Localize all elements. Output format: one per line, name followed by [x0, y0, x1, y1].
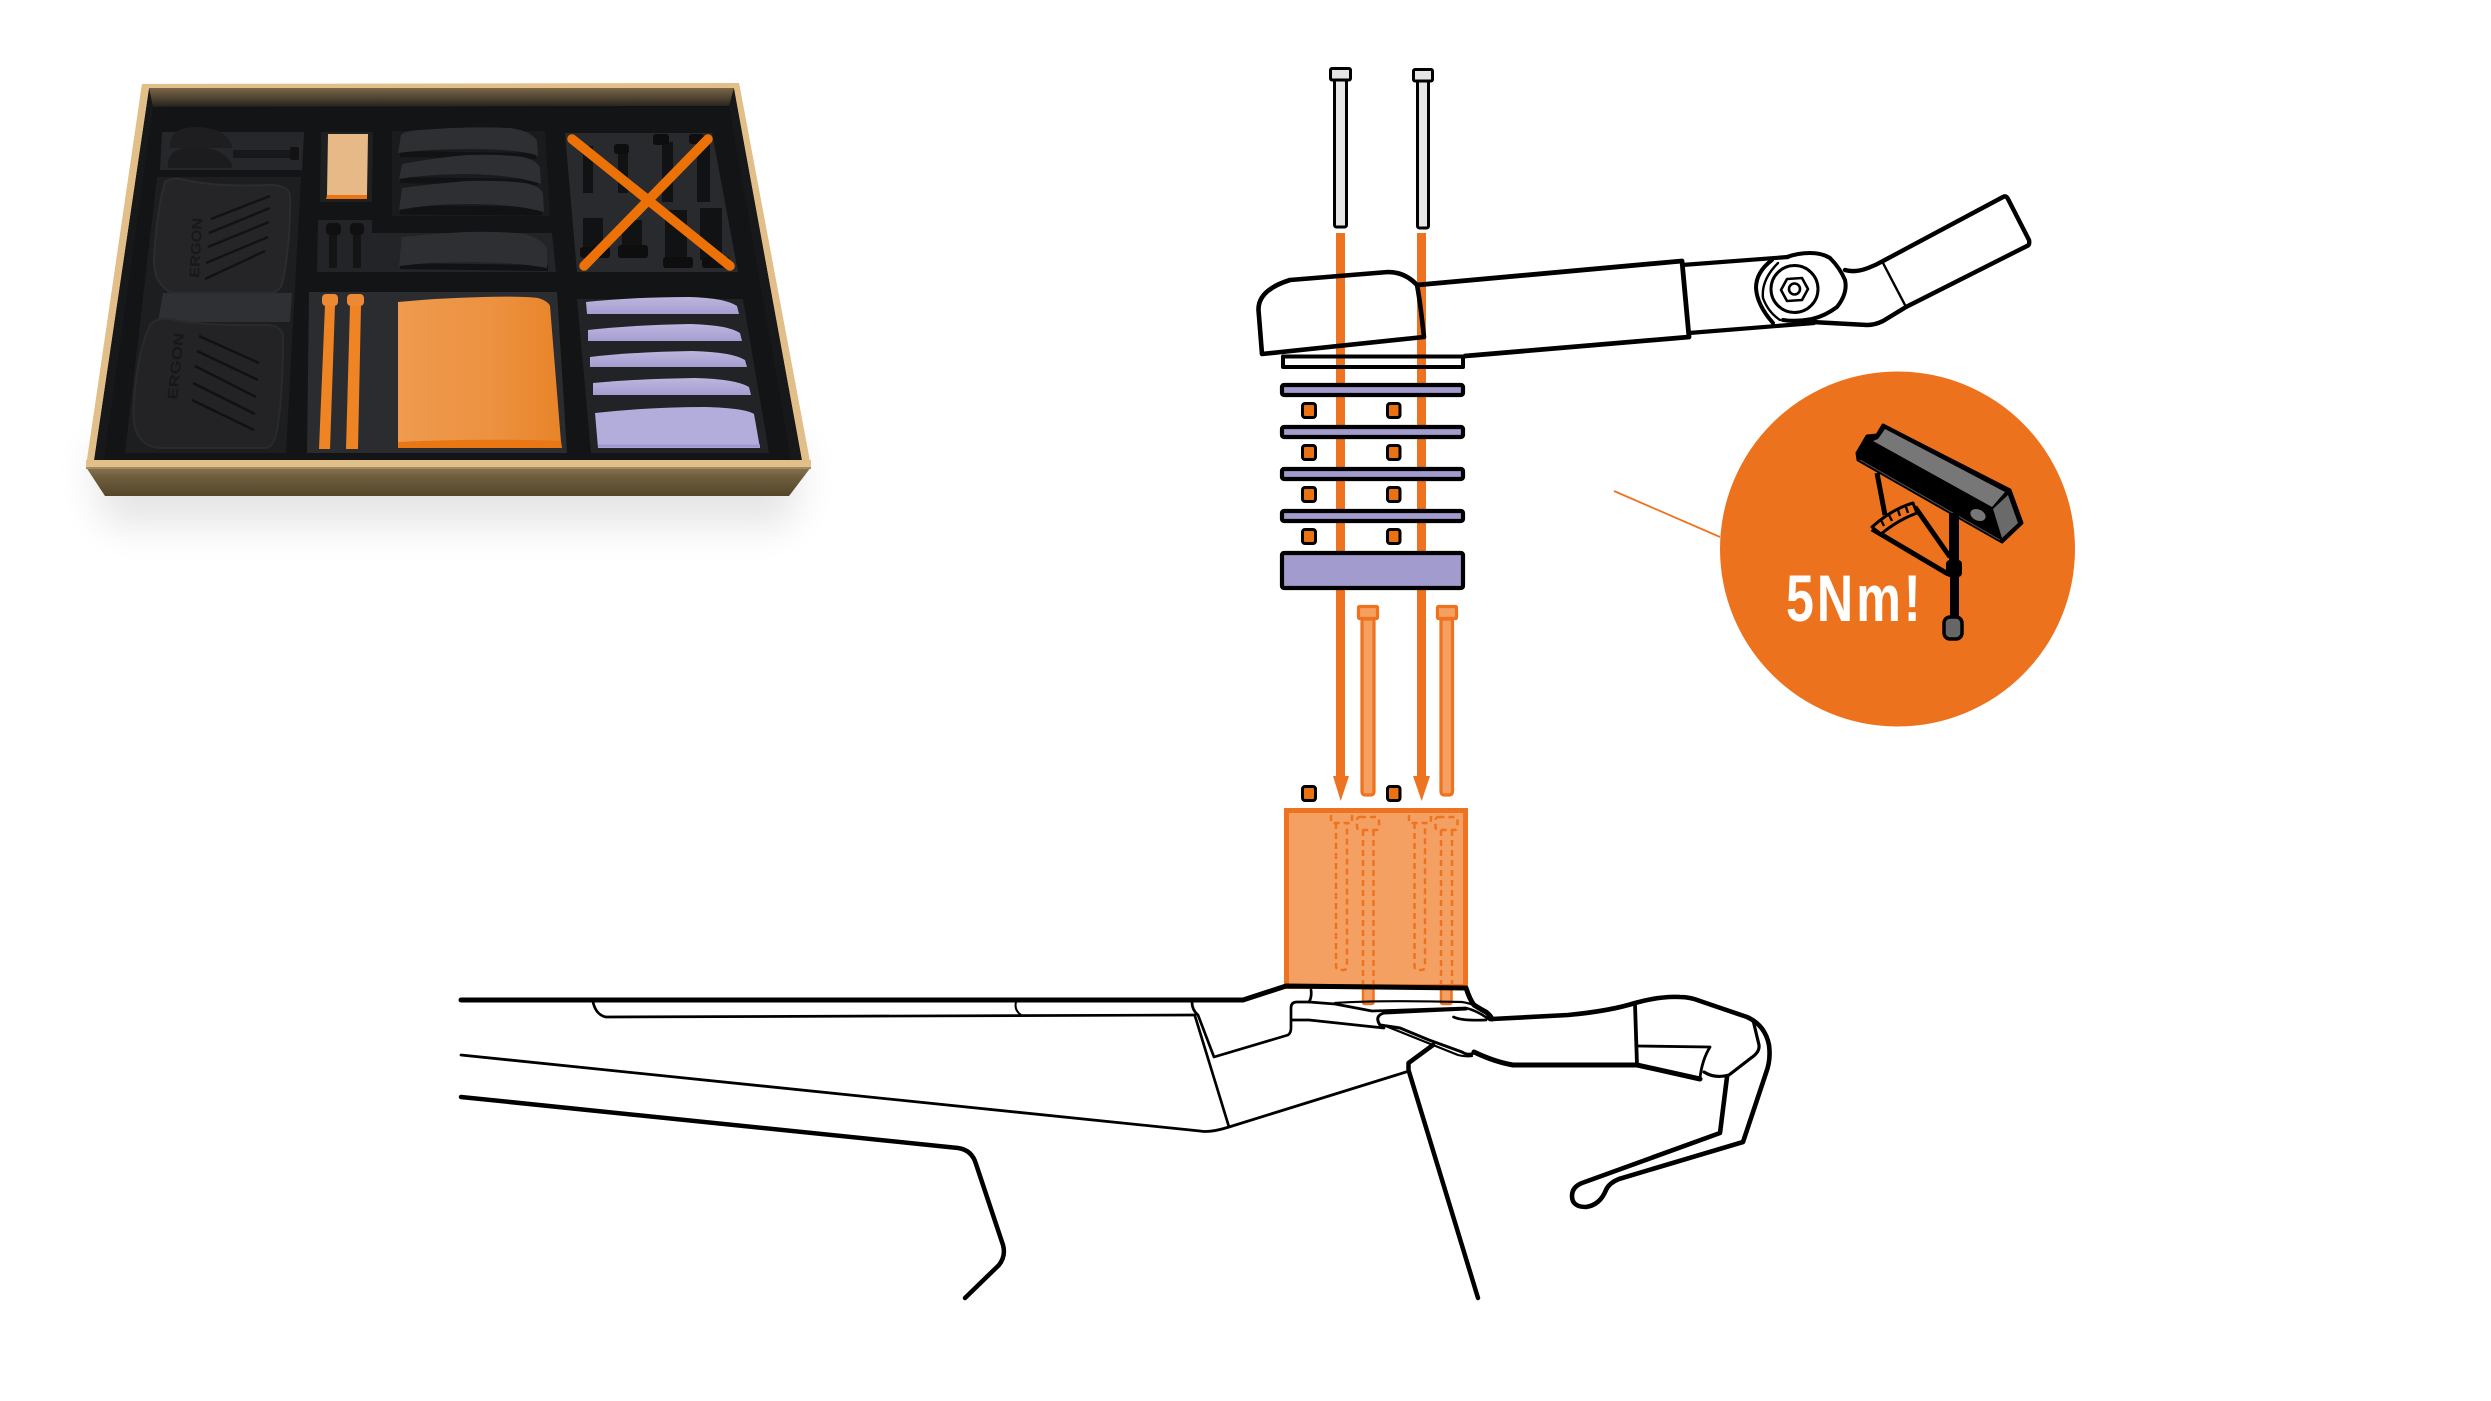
armrest shell	[1258, 272, 1424, 354]
thin spacer 1	[1282, 385, 1463, 395]
torque value: 5Nm!	[1786, 562, 1924, 636]
stem clamp lines	[1292, 1020, 1384, 1028]
aero extension with armrest	[1258, 196, 2029, 367]
pocket: black spacers	[392, 127, 550, 216]
extension sleeve	[1417, 261, 1689, 356]
orange arrow left	[1333, 233, 1349, 801]
pocket: orange bolts and orange sheet	[307, 292, 567, 453]
thin spacer 4	[1282, 511, 1463, 521]
callout leader line	[1614, 491, 1720, 537]
spacer stack	[1282, 385, 1463, 588]
pocket: purple spacers	[577, 297, 769, 453]
lower bolt right	[1438, 606, 1456, 795]
foam floor	[104, 106, 791, 460]
thin spacer 3	[1282, 469, 1463, 479]
bike cockpit line drawing	[461, 986, 1770, 1298]
top tube bottom line	[461, 1055, 1406, 1132]
tray shadow	[90, 450, 805, 525]
extension tip	[1812, 196, 2029, 325]
frame lower line	[461, 1097, 1004, 1298]
fork	[1408, 1045, 1478, 1298]
callout: torque 5 Nm	[1720, 372, 2075, 726]
right wall edge	[734, 83, 811, 467]
bolt ends below block	[1363, 985, 1452, 1004]
lower bolt left	[1358, 606, 1378, 795]
pocket: crossed-out long bolts	[565, 133, 738, 272]
small nuts	[1302, 404, 1400, 800]
icon: torque wrench on bar	[1857, 425, 2022, 639]
tray box	[86, 83, 811, 496]
top bolt right	[1414, 70, 1432, 228]
pocket and block: peach pad	[320, 132, 373, 202]
top bolt left	[1330, 68, 1350, 227]
pocket: small bolts and lower spacer	[317, 220, 556, 272]
arm pad upper	[154, 179, 290, 293]
top bolts	[1330, 68, 1432, 228]
base plate	[1283, 356, 1463, 367]
arm pad upper: ERGON	[186, 217, 205, 278]
orange cross	[572, 139, 730, 266]
pocket: clamps	[160, 127, 304, 170]
thick spacer	[1282, 553, 1463, 588]
pocket and arm pads	[125, 177, 301, 453]
orange stem block with hidden bolts	[1286, 810, 1466, 987]
tray of parts	[86, 83, 811, 525]
arm pad lower: ERGON	[164, 332, 187, 400]
steerer and base bar	[1474, 1052, 1700, 1079]
stem and top tube top line	[461, 986, 1492, 1019]
orange arrow right	[1413, 233, 1430, 801]
callout disc	[1720, 372, 2075, 726]
arm pad lower	[134, 319, 283, 448]
top tube details	[593, 1002, 1195, 1017]
thin spacer 2	[1282, 427, 1463, 437]
hidden bolts dashed	[1331, 815, 1458, 987]
orange lower bolts	[1358, 606, 1456, 795]
stem lip	[1378, 1009, 1474, 1054]
pivot joint	[1756, 253, 1846, 323]
extension tube	[1682, 257, 1814, 333]
